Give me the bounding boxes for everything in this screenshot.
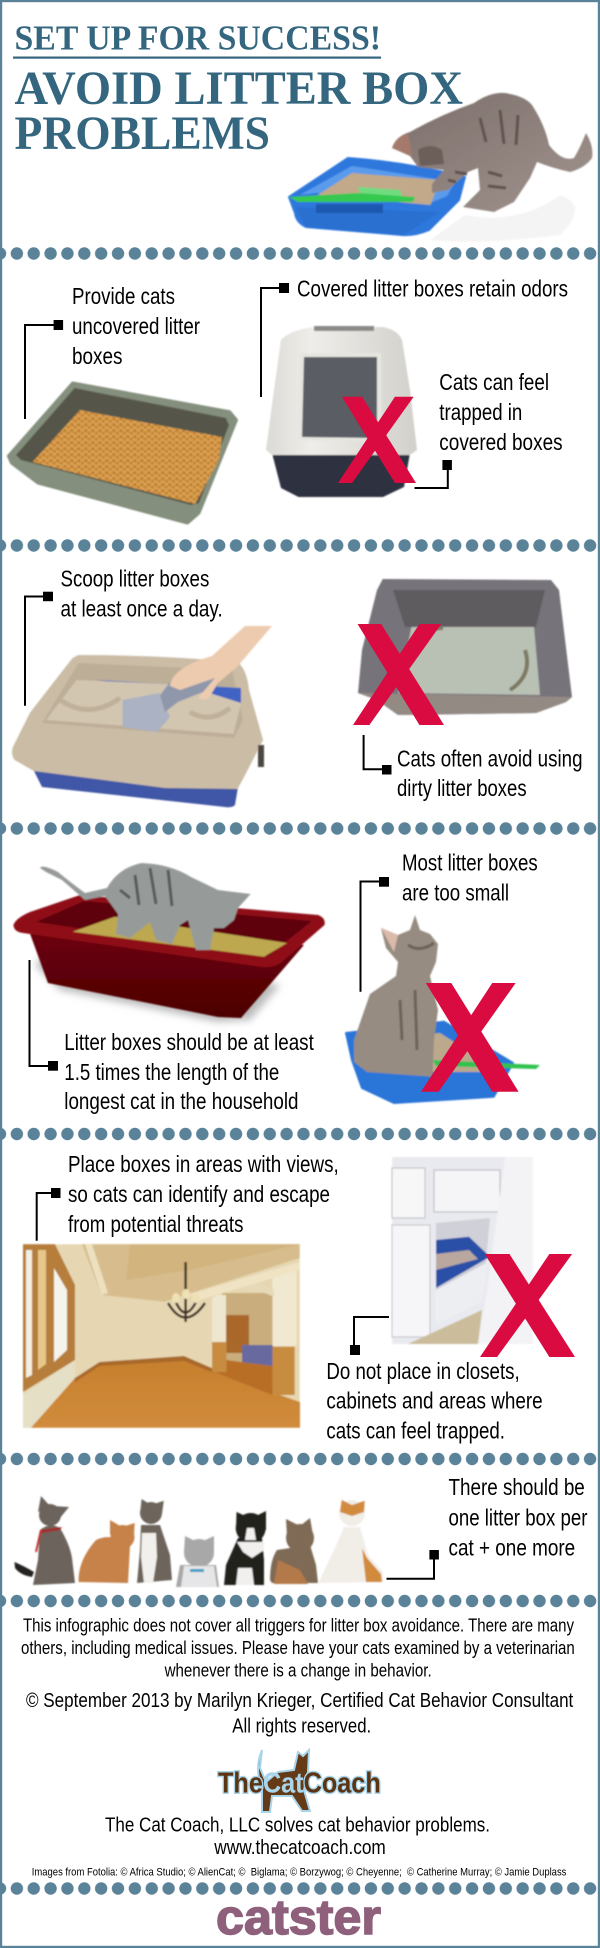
title line 1: AVOID LITTER BOX <box>14 62 463 115</box>
image: kitten in small blue box <box>346 915 540 1103</box>
dotted divider 3 <box>0 822 600 836</box>
text: box length rule <box>64 1029 314 1114</box>
text: avoid dirty boxes: dirty litter boxes <box>397 775 527 801</box>
text: scoop daily: Scoop litter boxes <box>60 566 209 592</box>
cat 4: silver and white <box>176 1536 219 1587</box>
text: copyright: All rights reserved. <box>232 1715 371 1738</box>
dotted divider 2 <box>0 538 600 552</box>
text: cat coach tagline <box>105 1814 490 1859</box>
image: green open litter tray <box>8 383 237 523</box>
connector: scoop <box>25 592 53 706</box>
image: closet with litter box <box>392 1157 533 1344</box>
text: cats feel trapped: Cats can feel <box>439 369 549 395</box>
text: boxes too small: Most litter boxes <box>402 850 538 876</box>
connector: too small <box>360 877 389 992</box>
text: place with views: Place boxes in areas with views, <box>68 1151 339 1177</box>
text: box length rule: 1.5 times the length of the <box>64 1059 279 1085</box>
text: closets warning: cats can feel trapped. <box>326 1417 505 1443</box>
connector: trapped <box>414 460 452 488</box>
logo: catster: catster <box>216 1891 381 1945</box>
text: scoop daily: at least once a day. <box>60 596 223 622</box>
text: place with views: so cats can identify and escape <box>68 1181 330 1207</box>
text: box length rule: Litter boxes should be at least <box>64 1029 314 1055</box>
panel: placement <box>23 1151 575 1443</box>
panel: box size <box>13 850 540 1114</box>
text: cats feel trapped: trapped in <box>439 399 522 425</box>
dotted divider 5 <box>0 1452 600 1466</box>
connector: covered <box>261 283 289 397</box>
image: dirty grey litter box <box>358 579 572 715</box>
text: provide uncovered boxes <box>72 283 200 369</box>
connector: closets <box>350 1317 389 1355</box>
text: closets warning <box>326 1358 543 1443</box>
connector: views <box>37 1188 60 1241</box>
panel: scooping <box>13 566 582 807</box>
cat 2: orange <box>78 1520 135 1583</box>
connector: one per cat <box>386 1550 439 1579</box>
icon: red X <box>353 624 444 725</box>
dotted divider 7 <box>0 1882 600 1896</box>
panel: number of boxes <box>14 1474 588 1587</box>
title line 2: PROBLEMS <box>14 107 270 160</box>
cat 3: tabby and white <box>137 1499 172 1583</box>
dotted divider 6 <box>0 1594 600 1608</box>
text: place with views <box>68 1151 339 1237</box>
text: closets warning: cabinets and areas where <box>326 1387 543 1413</box>
dotted divider 1 <box>0 246 600 260</box>
heading: set up for success: SET UP FOR SUCCESS! <box>14 18 381 58</box>
text: disclaimer <box>21 1615 575 1681</box>
image: open room <box>23 1244 300 1428</box>
image: row of seven cats <box>14 1496 383 1587</box>
text: provide uncovered boxes: uncovered litter <box>72 313 200 339</box>
text: boxes too small <box>402 850 538 906</box>
icon: red X <box>338 397 416 483</box>
text: copyright <box>26 1689 574 1738</box>
cat 6: calico <box>270 1518 318 1584</box>
dotted divider 4 <box>0 1127 600 1141</box>
text: box length rule: longest cat in the household <box>64 1088 298 1114</box>
icon: red X <box>480 1254 575 1357</box>
image: hand scooping litter box <box>13 626 272 807</box>
text: closets warning: Do not place in closets, <box>326 1358 520 1384</box>
text: provide uncovered boxes: boxes <box>72 343 122 369</box>
text: cats feel trapped: covered boxes <box>439 429 563 455</box>
image: covered litter box <box>266 326 417 497</box>
text: disclaimer: whenever there is a change in behavior. <box>164 1660 432 1681</box>
logo: The Cat Coach <box>218 1750 381 1812</box>
text: cat coach tagline: www.thecatcoach.com <box>213 1836 386 1859</box>
panel: footer <box>21 1615 575 1879</box>
text: cat coach tagline: The Cat Coach, LLC solves cat behavior problems. <box>105 1814 490 1837</box>
heading underline <box>13 56 381 59</box>
connector: provide <box>25 320 63 419</box>
text: boxes too small: are too small <box>402 880 509 906</box>
panel: uncovered vs covered boxes <box>8 276 568 523</box>
cat 7: white and orange <box>318 1500 383 1583</box>
text: avoid dirty boxes <box>397 746 582 801</box>
connector: dirty <box>364 735 392 774</box>
image: cat in red litter box <box>13 863 325 1022</box>
text: place with views: from potential threats <box>68 1211 243 1237</box>
cat 5: black and white <box>224 1511 266 1585</box>
logo: The Cat Coach: TheCatCoach <box>218 1768 381 1800</box>
connector: length <box>30 960 58 1071</box>
image: kitten at blue litter box <box>289 93 592 242</box>
icon: red X <box>421 983 519 1092</box>
text: cats feel trapped <box>439 369 563 455</box>
panel: header <box>13 18 592 242</box>
cat 1: grey tabby <box>14 1496 75 1585</box>
text: provide uncovered boxes: Provide cats <box>72 283 175 309</box>
text: one box per cat <box>448 1474 588 1561</box>
text: scoop daily <box>60 566 223 622</box>
